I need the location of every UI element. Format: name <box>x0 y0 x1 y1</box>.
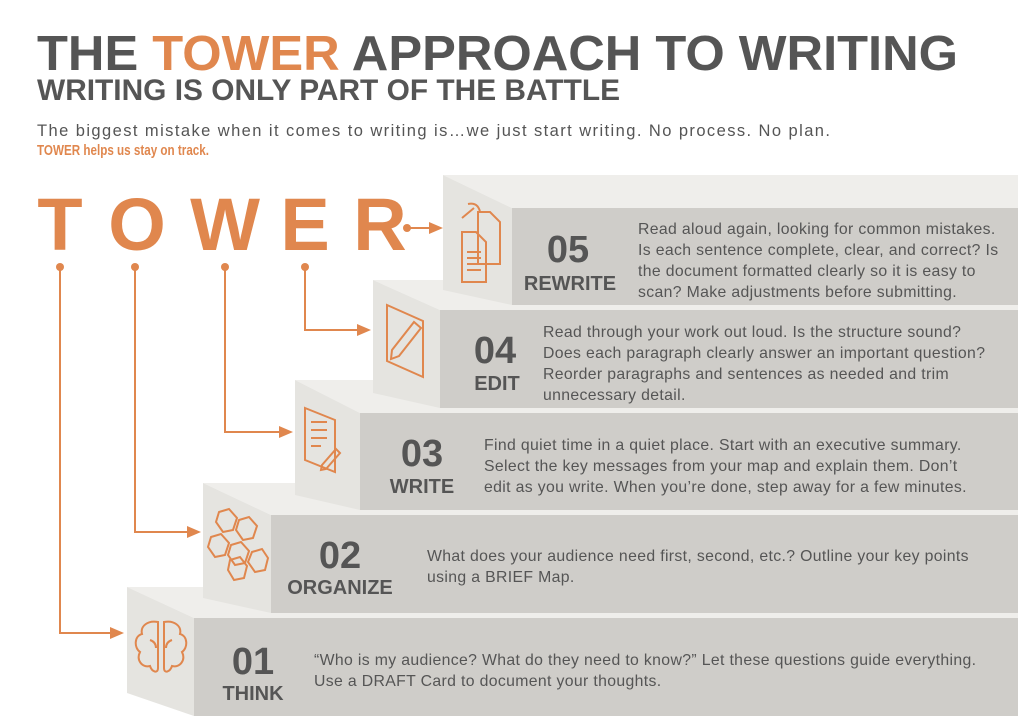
TOWER letters: T <box>37 183 83 266</box>
step 02 <box>203 483 1018 613</box>
step 02: ORGANIZE <box>287 577 393 599</box>
step 04: Read through your work out loud. Is the structure sound? <box>543 324 961 341</box>
step 05: scan? Make adjustments before submitting. <box>638 284 957 301</box>
step 01: THINK <box>222 683 284 705</box>
TOWER letters: E <box>280 183 330 266</box>
step 04: Does each paragraph clearly answer an important question? <box>543 345 985 362</box>
step 02: What does your audience need first, second, etc.? Outline your key points <box>427 548 969 565</box>
step 05: REWRITE <box>524 273 616 295</box>
TOWER letters <box>37 183 407 266</box>
intro text <box>37 122 830 159</box>
step 05: Is each sentence complete, clear, and correct? Is <box>638 242 998 259</box>
step 03 <box>295 380 1018 510</box>
title: THE TOWER APPROACH TO WRITING <box>37 27 958 81</box>
step 01: Use a DRAFT Card to document your thoughts. <box>314 673 662 690</box>
TOWER letters: W <box>190 183 260 266</box>
subtitle: WRITING IS ONLY PART OF THE BATTLE <box>37 74 620 107</box>
step 01 <box>127 587 1018 716</box>
step 04: 04 <box>474 330 516 372</box>
step 03: Find quiet time in a quiet place. Start with an executive summary. <box>484 437 962 454</box>
step 02: 02 <box>319 535 361 577</box>
TOWER letters: R <box>353 183 407 266</box>
step 04 <box>373 280 1018 408</box>
step 01: 01 <box>232 641 274 683</box>
step 05: 05 <box>547 229 589 271</box>
step 05: Read aloud again, looking for common mistakes. <box>638 221 996 238</box>
step 03: 03 <box>401 433 443 475</box>
connector arrows <box>60 228 437 633</box>
step 04: Reorder paragraphs and sentences as needed and trim <box>543 366 949 383</box>
step 03: edit as you write. When you’re done, step away for a few minutes. <box>484 479 967 496</box>
step 03: Select the key messages from your map and explain them. Don’t <box>484 458 958 475</box>
step 05 <box>443 175 1018 305</box>
step 03: WRITE <box>390 476 454 498</box>
intro text: TOWER helps us stay on track. <box>37 143 209 159</box>
step 04: unnecessary detail. <box>543 387 686 404</box>
step 04: EDIT <box>474 373 520 395</box>
step 02: using a BRIEF Map. <box>427 569 575 586</box>
step 01: “Who is my audience? What do they need to know?” Let these questions guide everything. <box>314 652 976 669</box>
intro text: The biggest mistake when it comes to writing is…we just start writing. No process. No plan. <box>37 122 830 140</box>
step 05: the document formatted clearly so it is easy to <box>638 263 976 280</box>
TOWER letters: O <box>108 183 166 266</box>
